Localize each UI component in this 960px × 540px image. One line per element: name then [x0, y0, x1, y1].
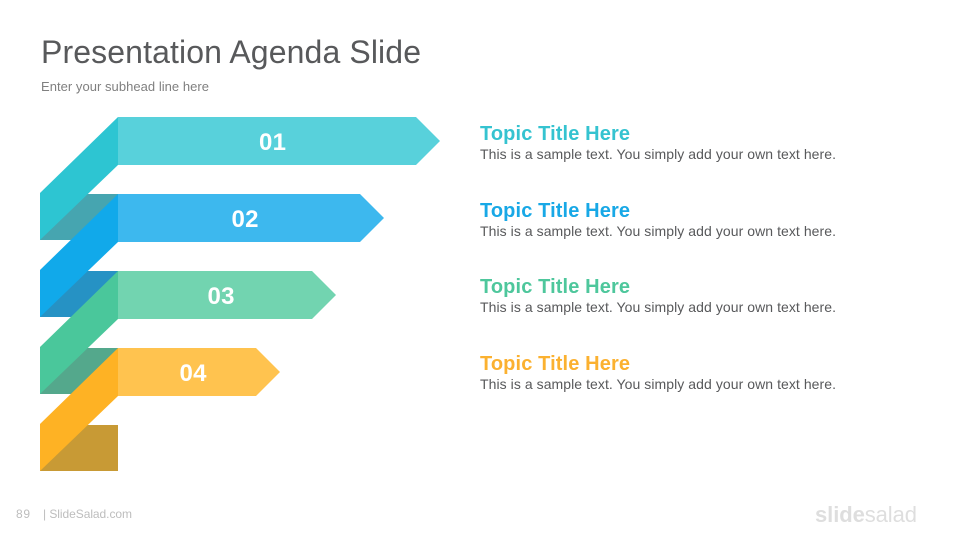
folded ribbon chart [40, 117, 440, 471]
fold shadow 1 [40, 194, 118, 240]
fold shadow 4 [40, 425, 118, 471]
subhead: Enter your subhead line here [41, 79, 209, 94]
topic 2 text [480, 200, 836, 239]
topic 3 heading: Topic Title Here [480, 276, 630, 298]
diagonal band 4 [40, 348, 118, 471]
number 01: 01 [259, 129, 286, 156]
arrow bar 1 [118, 117, 440, 165]
ribbon 1: teal [40, 117, 440, 240]
number 02: 02 [232, 206, 258, 233]
topic 4 text [480, 353, 836, 392]
topic 4 heading: Topic Title Here [480, 353, 630, 375]
topic 2 body: This is a sample text. You simply add your own text here. [480, 223, 836, 239]
topic 1 text [480, 123, 836, 162]
topic 4 body: This is a sample text. You simply add your own text here. [480, 376, 836, 392]
diagonal band 3 [40, 271, 118, 394]
arrow bar 4 [118, 348, 280, 396]
topic 3 text [480, 276, 836, 315]
arrow bar 3 [118, 271, 336, 319]
number 04: 04 [180, 360, 207, 387]
footer source: | SlideSalad.com [43, 507, 132, 521]
topic 3 body: This is a sample text. You simply add your own text here. [480, 299, 836, 315]
ribbon 3: green [40, 271, 336, 394]
diagonal band 1 [40, 117, 118, 240]
arrow bar 2 [118, 194, 384, 242]
fold shadow 2 [40, 271, 118, 317]
topic 2 heading: Topic Title Here [480, 200, 630, 222]
title: Presentation Agenda Slide [41, 34, 421, 70]
diagonal band 2 [40, 194, 118, 317]
logo wordmark: slidesalad [815, 502, 917, 527]
topic 1 body: This is a sample text. You simply add your own text here. [480, 146, 836, 162]
topic 1 heading: Topic Title Here [480, 123, 630, 145]
footer page number: 89 [16, 507, 30, 521]
ribbon 2: blue [40, 194, 384, 317]
fold shadow 3 [40, 348, 118, 394]
number 03: 03 [208, 283, 234, 310]
ribbon 4: orange [40, 348, 280, 471]
